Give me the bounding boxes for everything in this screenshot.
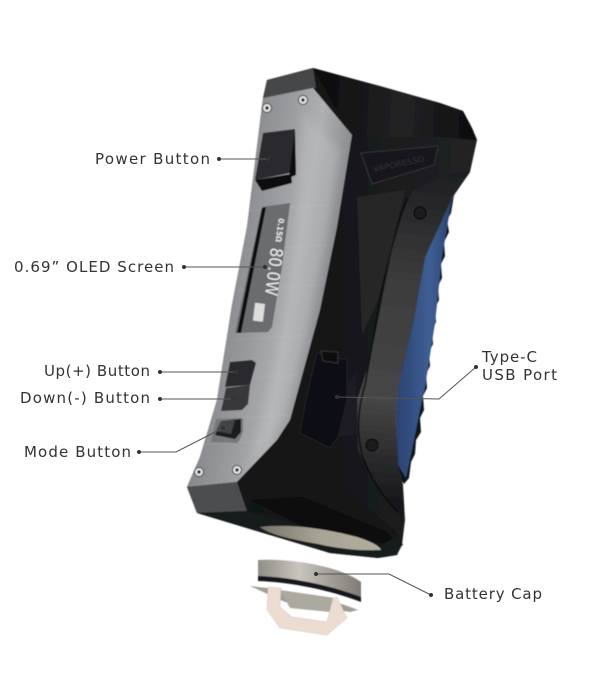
label: down button: Down(-) Button [20,389,150,407]
label: up button: Up(+) Button [44,362,150,380]
label: USB port: USB Port [482,366,557,384]
label: USB port: Type-C [481,348,537,366]
mode button [211,418,243,443]
label: mode button: Mode Button [24,443,131,461]
black bottom facets [237,420,403,552]
silver front plate [187,88,352,487]
leader dots [137,157,478,597]
screws [194,96,308,476]
side grip panel [357,172,470,520]
label: battery cap: Battery Cap [444,585,542,603]
brushed lines [204,205,330,445]
down button [221,385,250,411]
label: USB port [481,348,557,384]
black main body [187,68,477,558]
USB port cover [300,351,357,448]
top dome [313,68,477,140]
screen readout: 0.15Ω [274,218,286,243]
dark lower bevel [187,482,247,513]
cap pull ring [267,587,347,635]
plate highlight [245,112,340,475]
battery cap [250,560,361,635]
up button [225,360,256,387]
grip groove [359,198,407,512]
label: OLED screen: 0.69” OLED Screen [14,258,174,276]
power button [255,129,296,191]
grey top bevel [263,68,316,98]
leader lines [139,159,476,595]
battery bay window [260,526,381,550]
OLED screen [235,203,290,333]
label: power button: Power Button [95,150,210,168]
screen readout: 80.0W [260,247,286,297]
blue rubber grip [395,195,454,484]
side facet [357,190,405,335]
brand emblem [361,146,438,184]
device body [187,68,477,558]
brand emblem: VAPORESSO [373,154,425,174]
screen readout [253,216,290,324]
